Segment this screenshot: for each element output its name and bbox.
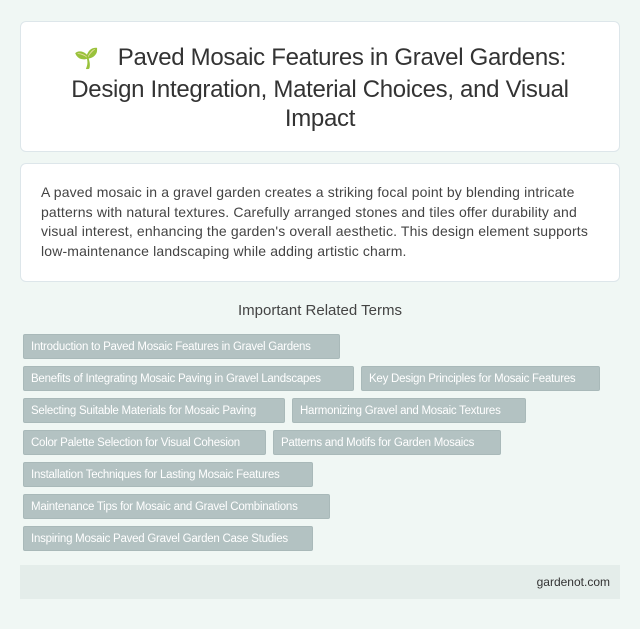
tag: Maintenance Tips for Mosaic and Gravel Combinations (31, 501, 298, 513)
tag: Introduction to Paved Mosaic Features in Gravel Gardens (31, 341, 311, 353)
description text: visual interest, enhancing the garden's overall aesthetic. This design element supports (41, 223, 588, 239)
section heading: Important Related Terms (238, 302, 402, 319)
description card (20, 163, 620, 282)
tag (23, 462, 313, 487)
title: 🌱 Paved Mosaic Features in Gravel Gardens: Design Integration, Material Choices, and Visual Impact (71, 44, 569, 132)
tag: Color Palette Selection for Visual Cohesion (31, 437, 240, 449)
tag (361, 366, 600, 391)
tag: Inspiring Mosaic Paved Gravel Garden Case Studies (31, 533, 288, 545)
tag (23, 526, 313, 551)
tag: Patterns and Motifs for Garden Mosaics (281, 437, 474, 449)
tag: Benefits of Integrating Mosaic Paving in Gravel Landscapes (31, 373, 321, 385)
description text: low-maintenance landscaping while adding artistic charm. (41, 242, 407, 258)
description text (41, 184, 588, 259)
tag (23, 494, 330, 519)
description text: patterns with natural textures. Carefully arranged stones and tiles offer durability and (41, 204, 577, 220)
tag (23, 398, 285, 423)
tag (23, 366, 354, 391)
tag: Selecting Suitable Materials for Mosaic Paving (31, 405, 256, 417)
title card (20, 21, 620, 152)
tag (292, 398, 526, 423)
footer text: gardenot.com (537, 575, 610, 589)
tag (273, 430, 501, 455)
tag (23, 334, 340, 359)
description text: A paved mosaic in a gravel garden creates a striking focal point by blending intricate (41, 184, 575, 200)
footer (20, 565, 620, 599)
tag: Key Design Principles for Mosaic Features (369, 373, 575, 385)
tag: Harmonizing Gravel and Mosaic Textures (300, 405, 501, 417)
tag: Installation Techniques for Lasting Mosaic Features (31, 469, 280, 481)
tag (23, 430, 266, 455)
